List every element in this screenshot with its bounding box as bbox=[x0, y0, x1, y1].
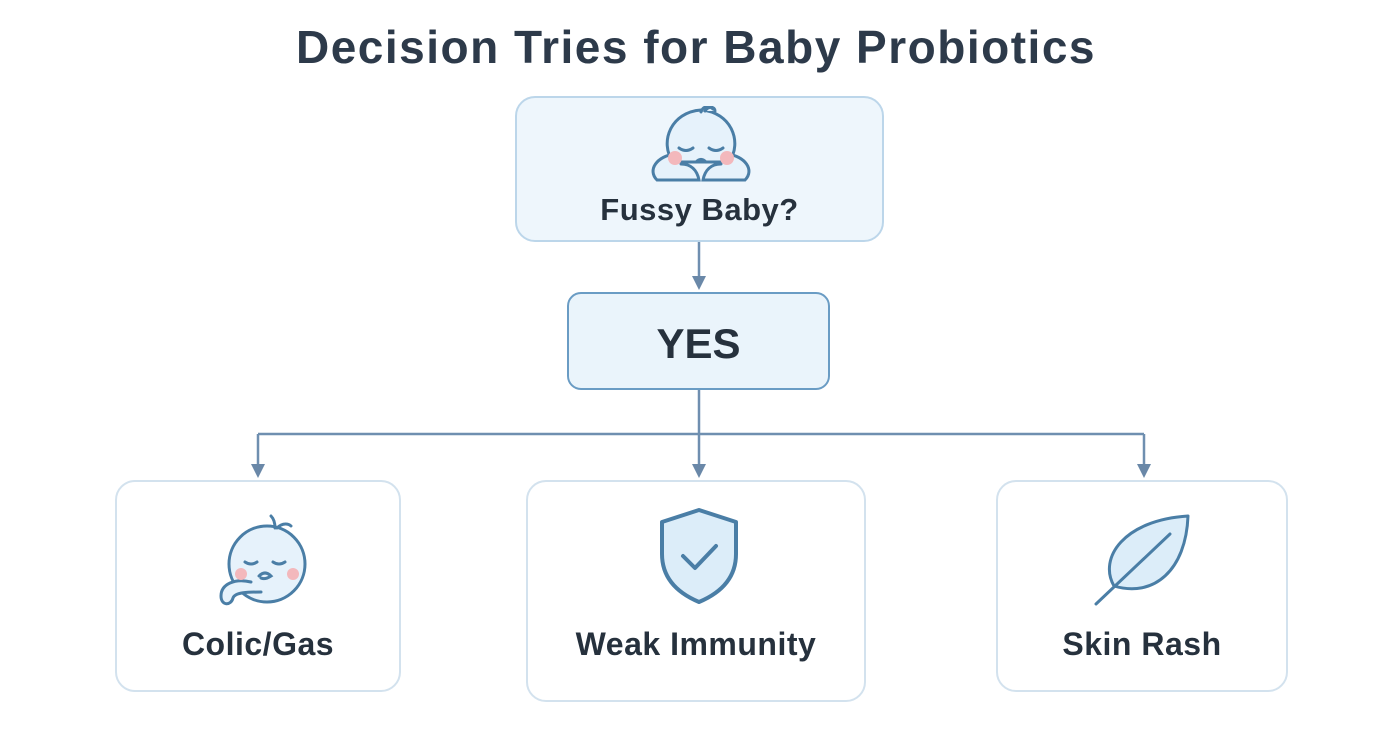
panel: yes bbox=[567, 292, 830, 390]
icon: shield bbox=[660, 508, 738, 604]
panel: skin rash bbox=[996, 480, 1288, 692]
label: colic/gas: Colic/Gas bbox=[182, 626, 334, 662]
label: fussy baby: Fussy Baby? bbox=[600, 192, 799, 227]
label: skin rash: Skin Rash bbox=[1062, 626, 1222, 662]
title: Decision Tries for Baby Probiotics bbox=[296, 21, 1096, 73]
icon: colic baby bbox=[220, 514, 306, 606]
label: weak immunity: Weak Immunity bbox=[576, 626, 816, 662]
icon: leaf bbox=[1094, 514, 1190, 606]
icon: sleepy baby bbox=[652, 106, 750, 182]
panel: weak immunity bbox=[526, 480, 866, 702]
panel: colic/gas bbox=[115, 480, 401, 692]
panel: fussy baby bbox=[515, 96, 884, 242]
label: yes: YES bbox=[656, 320, 741, 367]
